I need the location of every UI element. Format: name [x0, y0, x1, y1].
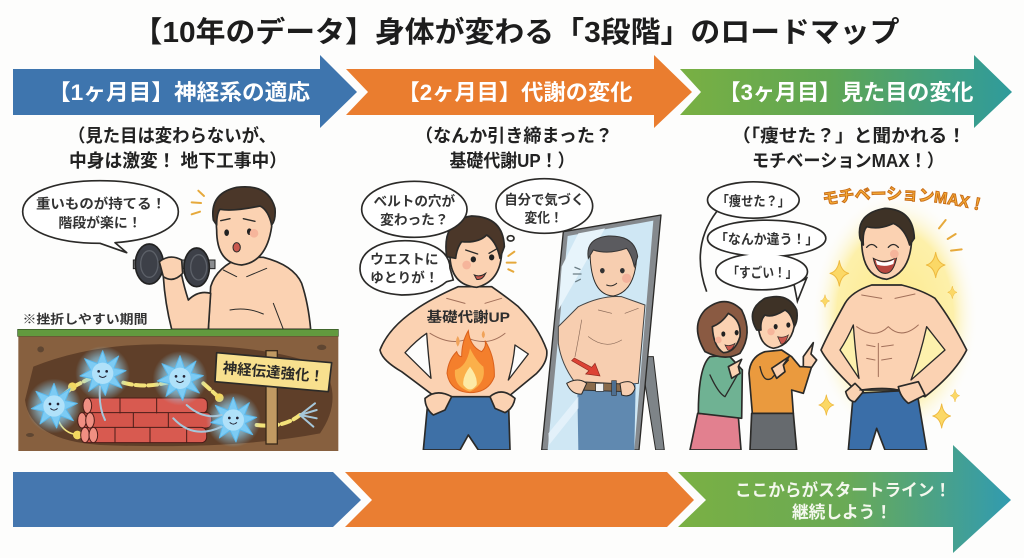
- top arrow: month 1: [13, 55, 357, 128]
- bottom arrow: month 3: 継続しよう！: [792, 503, 892, 522]
- bottom arrow: month 3: ここからがスタートライン！: [735, 480, 951, 500]
- head: [449, 236, 502, 288]
- motivation max label: モチベーションMAX！: [824, 186, 980, 210]
- title: 【10年のデータ】身体が変わる「3段階」のロードマップ: [132, 15, 900, 49]
- subtitle: month 3: モチベーションMAX！）: [752, 151, 944, 171]
- subtitle: month 1: 中身は激変！ 地下工事中）: [69, 151, 287, 171]
- bottom arrow: month 3: [678, 445, 1011, 553]
- boy: [749, 297, 817, 450]
- bottom arrow: month 1: [13, 472, 361, 527]
- panel: month 2 illustration: [360, 179, 664, 450]
- man lifting dumbbell: [133, 187, 311, 329]
- speech bubble: belt: [362, 181, 467, 237]
- subtitle: month 2: [415, 126, 613, 171]
- speech bubble: heavy things: [23, 181, 178, 253]
- triple speech bubble: 「痩せた？」: [717, 193, 790, 209]
- neurons: [27, 346, 261, 447]
- glow: [820, 205, 970, 420]
- man with flame: [380, 216, 547, 450]
- emphasis marks: [192, 191, 204, 214]
- top arrow: month 3: 【3ヶ月目】見た目の変化: [718, 80, 974, 105]
- sign post: 神経伝達強化！: [222, 360, 325, 386]
- flame: [447, 331, 494, 393]
- subtitle: month 2: 基礎代謝UP！）: [450, 151, 574, 171]
- speech bubble: belt: ベルトの穴が: [373, 193, 456, 209]
- subtitle: month 2: （なんか引き締まった？: [415, 126, 613, 146]
- thought bubble: self notice: 変化！: [524, 211, 563, 226]
- hands on hips: [425, 393, 452, 415]
- panel: month 1 illustration: [18, 181, 338, 451]
- speech bubble: heavy things: 階段が楽に！: [58, 214, 142, 230]
- speech bubble: waist: ウエストに: [370, 252, 438, 267]
- top arrow: month 1: 【1ヶ月目】神経系の適応: [48, 80, 310, 105]
- top arrow: month 2: 【2ヶ月目】代謝の変化: [398, 80, 632, 105]
- dumbbell: [133, 244, 215, 287]
- red arrow: [572, 358, 600, 376]
- metabolism label: 基礎代謝UP: [427, 309, 510, 325]
- nerve endings: [100, 387, 317, 432]
- triple speech bubble: [700, 183, 825, 298]
- speech bubble: waist: [360, 241, 453, 295]
- sign post: [215, 351, 332, 444]
- note: frustration period: ※挫折しやすい期間: [22, 311, 147, 326]
- speech bubble: waist: ゆとりが！: [370, 270, 438, 286]
- panel: month 3 illustration: [689, 181, 980, 450]
- top arrow: month 2: [346, 55, 692, 128]
- thought bubble: self notice: [496, 179, 593, 241]
- triple speech bubble: 「すごい！」: [727, 264, 797, 280]
- speech bubble: heavy things: 重いものが持てる！: [36, 196, 166, 212]
- thought bubble: self notice: 自分で気づく: [504, 191, 584, 207]
- mirror: [542, 215, 664, 450]
- underground cross-section: [18, 329, 338, 451]
- reflection of man: [548, 236, 645, 450]
- subtitle: month 1: （見た目は変わらないが、: [68, 125, 276, 146]
- muscle fibers: [78, 398, 212, 443]
- belt: [584, 381, 621, 392]
- bottom arrow: month 2: [345, 472, 694, 527]
- triple speech bubble: 「なんか違う！」: [715, 231, 818, 247]
- speech bubble: belt: 変わった？: [380, 212, 448, 227]
- subtitle: month 3: [732, 126, 966, 171]
- muscular man: [821, 208, 967, 450]
- subtitle: month 1: [68, 125, 287, 171]
- head: [860, 224, 912, 280]
- nerve connections: [53, 373, 300, 426]
- top arrow: month 3: [680, 55, 1012, 128]
- sparkles: [819, 220, 962, 428]
- woman: [690, 302, 747, 450]
- subtitle: month 3: （「痩せた？」と聞かれる！: [732, 126, 966, 146]
